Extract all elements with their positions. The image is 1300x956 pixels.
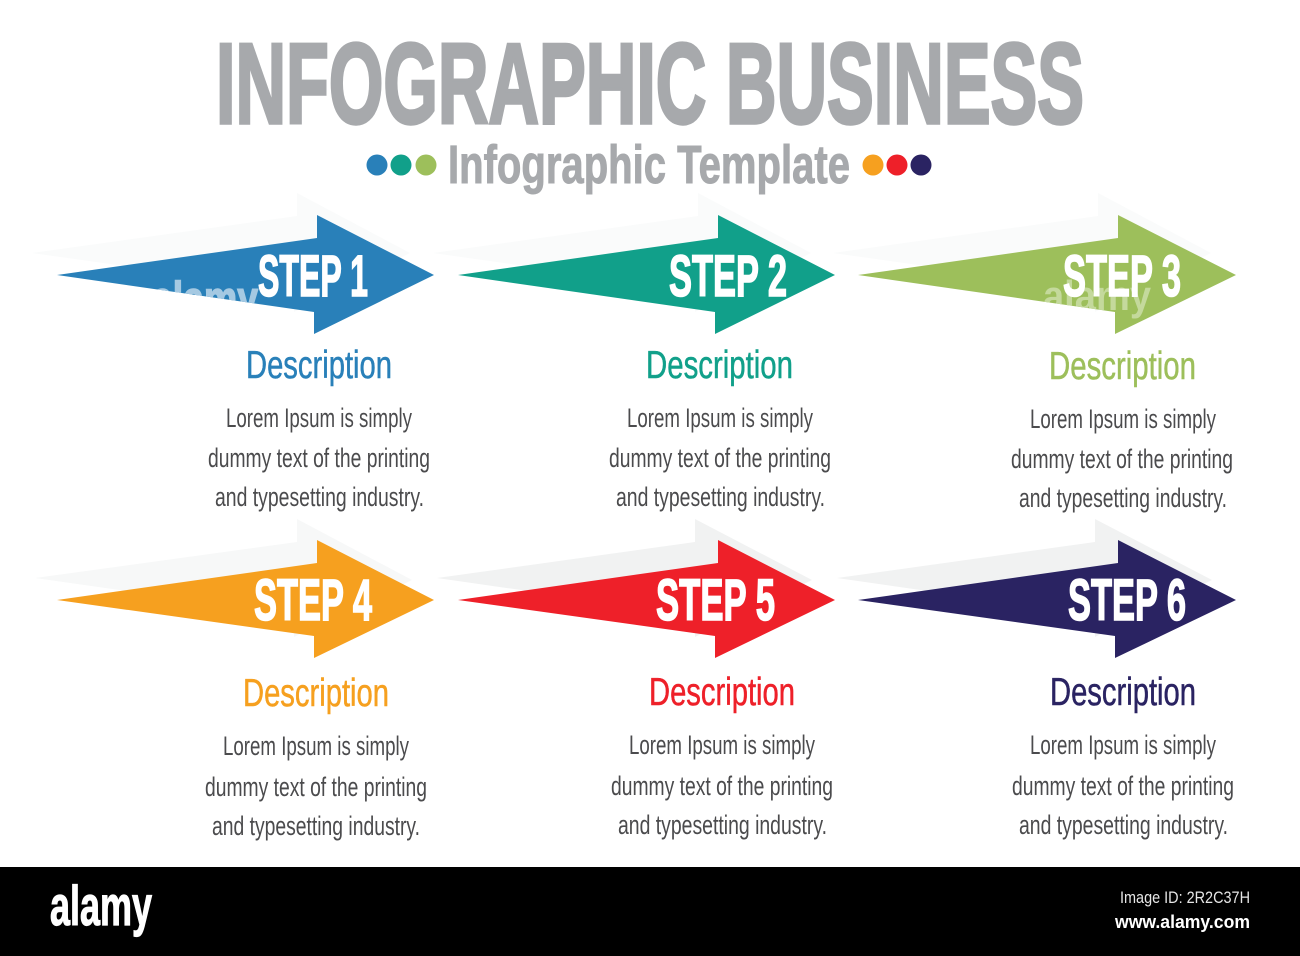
arrow — [858, 540, 1236, 658]
step label: STEP 5 — [656, 568, 775, 633]
body text: Lorem Ipsum is simply — [226, 403, 412, 433]
body text: dummy text of the printing — [208, 443, 430, 473]
body text: dummy text of the printing — [205, 772, 427, 802]
panel: step 6 — [837, 519, 1236, 840]
body text — [208, 403, 430, 512]
arrow — [57, 540, 434, 658]
body text: and typesetting industry. — [215, 482, 424, 512]
arrow shadow — [833, 193, 1211, 312]
step label: STEP 1 — [258, 244, 368, 309]
step label: STEP 6 — [1068, 568, 1186, 633]
dots: left — [366, 154, 436, 176]
body text — [205, 731, 427, 841]
panel: step 5 — [437, 519, 835, 840]
watermark: alamy — [1043, 272, 1152, 319]
step label: STEP 2 — [669, 244, 787, 309]
body text — [609, 403, 831, 512]
footer bar — [0, 867, 1300, 956]
arrow shadow — [437, 519, 812, 637]
body text: and typesetting industry. — [616, 482, 825, 512]
body text: Lorem Ipsum is simply — [629, 730, 815, 760]
step label: STEP 4 — [254, 568, 372, 633]
body text: and typesetting industry. — [212, 811, 420, 841]
subtitle: Infographic Template — [448, 135, 850, 195]
step label: STEP 3 — [1063, 244, 1181, 309]
arrow — [858, 215, 1236, 334]
panel: step 4 — [35, 519, 434, 841]
heading: Description — [646, 344, 793, 387]
arrow shadow — [433, 193, 811, 312]
dots: right — [862, 154, 932, 176]
body text: dummy text of the printing — [609, 443, 831, 473]
body text: Lorem Ipsum is simply — [1030, 730, 1216, 760]
body text: dummy text of the printing — [611, 771, 833, 801]
image id: Image ID: 2R2C37H — [1120, 888, 1250, 907]
arrow shadow — [35, 519, 412, 637]
heading: Description — [1050, 671, 1196, 714]
body text: and typesetting industry. — [618, 810, 827, 840]
website: www.alamy.com — [1114, 912, 1250, 932]
footer logo: alamy — [50, 874, 152, 937]
panel: step 3 — [858, 215, 1236, 512]
heading: Description — [246, 344, 392, 387]
body text — [611, 730, 833, 840]
subtitle row — [366, 135, 932, 195]
body text — [1012, 730, 1234, 840]
body text: Lorem Ipsum is simply — [1030, 404, 1216, 434]
heading: Description — [649, 671, 795, 714]
body text: Lorem Ipsum is simply — [223, 731, 409, 761]
body text: Lorem Ipsum is simply — [627, 403, 813, 433]
heading: Description — [1049, 345, 1196, 388]
arrow shadow — [837, 519, 1212, 637]
heading: Description — [243, 672, 389, 715]
watermark: alamy — [152, 272, 258, 324]
panel: step 1 — [57, 215, 434, 512]
arrow — [57, 215, 434, 334]
body text — [1011, 404, 1233, 513]
arrow — [458, 215, 835, 334]
arrow shadow — [32, 193, 410, 312]
panel: step 2 — [433, 193, 835, 512]
arrow — [458, 540, 835, 658]
